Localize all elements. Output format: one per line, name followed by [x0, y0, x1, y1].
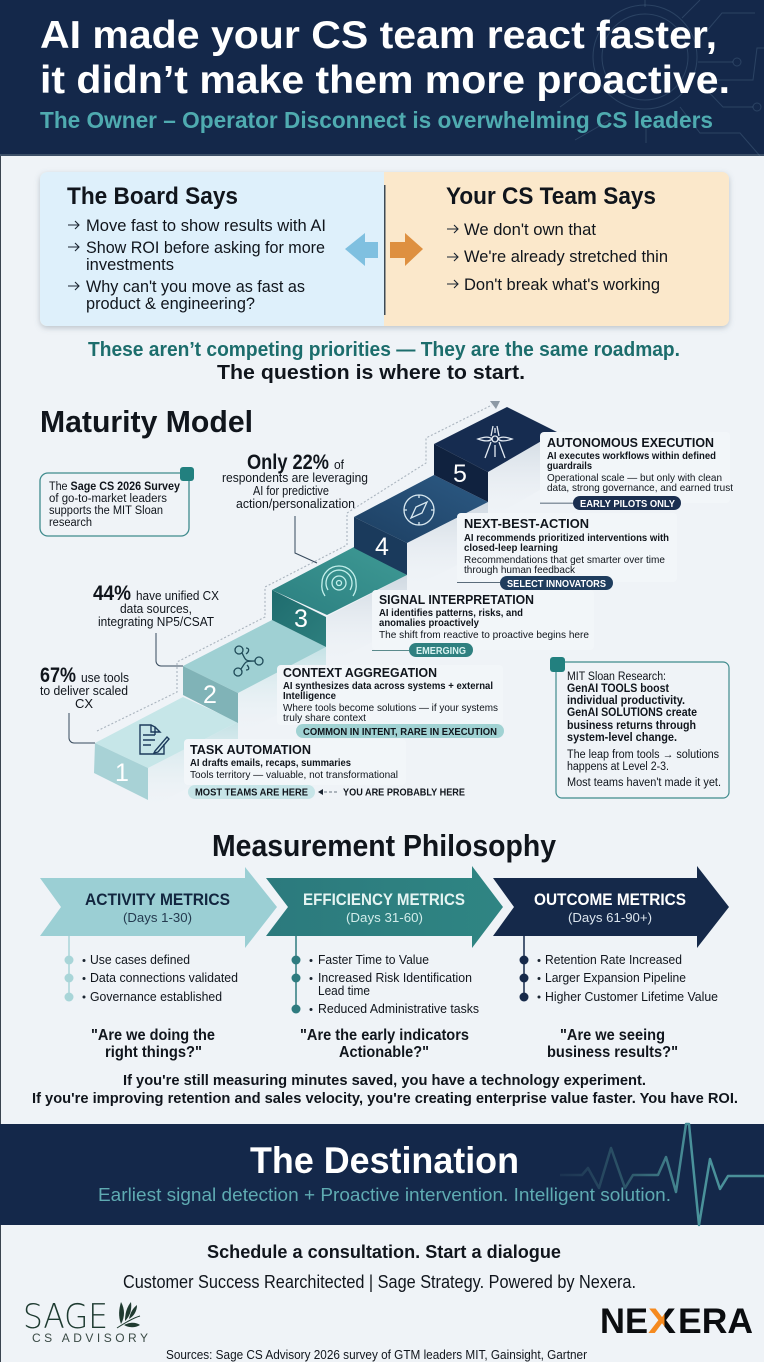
arrow: activity: (Days 1-30)	[123, 910, 192, 925]
checklist: outcome: Higher Customer Lifetime Value	[545, 990, 718, 1004]
level 5: autonomous execution: AUTONOMOUS EXECUTION	[547, 435, 714, 450]
destination subtitle: Earliest signal detection + Proactive intervention. Intelligent solution.	[98, 1184, 671, 1205]
level 2: context aggregation: AI synthesizes data across systems + external	[283, 680, 493, 692]
callout: sage survey: research	[49, 517, 92, 529]
checklist: outcome: Retention Rate Increased	[545, 953, 682, 967]
level 1: task automation: Tools territory — valuable, not transformational	[190, 769, 398, 781]
stat: 44 percent: have unified CX	[136, 588, 219, 603]
logo: nexera: ERA	[678, 1302, 753, 1341]
title	[40, 14, 730, 102]
stat: 22 percent: action/personalization	[236, 496, 355, 511]
arrow: efficiency: EFFICIENCY METRICS	[303, 891, 465, 909]
level 4: next-best-action: AI recommends prioritized interventions with	[464, 532, 669, 544]
dotted progress path	[97, 401, 500, 731]
callout: mit sloan research: The leap from tools → solutions	[567, 749, 719, 761]
step 5: 5	[453, 460, 467, 488]
level 2: context aggregation: truly share context	[283, 712, 366, 724]
board column: Show ROI before asking for more	[86, 238, 325, 257]
arrow: activity: ACTIVITY METRICS	[85, 891, 230, 909]
checklist: efficiency: Reduced Administrative tasks	[318, 1002, 479, 1016]
board column: investments	[86, 255, 174, 274]
icon: compass	[404, 495, 434, 525]
checklist: activity: Use cases defined	[90, 953, 190, 967]
checklist: outcome	[520, 936, 718, 1004]
closing statement	[32, 1073, 738, 1107]
level 2: context aggregation: CONTEXT AGGREGATION	[283, 665, 437, 680]
stat: 22 percent: respondents are leveraging	[222, 470, 368, 485]
subtitle: The Owner – Operator Disconnect is overwhelming CS leaders	[40, 107, 713, 133]
stat: 67 percent	[40, 664, 129, 743]
column: outcome metrics	[493, 866, 729, 1061]
panel: board vs team	[40, 172, 729, 326]
stat: 22 percent: of	[334, 457, 344, 472]
level 4: next-best-action: closed-leep learning	[464, 542, 558, 554]
callout: mit sloan research: Most teams haven't made it yet.	[567, 777, 721, 789]
checklist: outcome: Larger Expansion Pipeline	[545, 971, 686, 985]
badge: select innovators: SELECT INNOVATORS	[507, 578, 606, 590]
badge: most teams: MOST TEAMS ARE HERE	[195, 786, 308, 798]
level 4: next-best-action: Recommendations that get smarter over time	[464, 554, 665, 566]
step 4: 4	[375, 533, 389, 561]
stat: 22 percent	[222, 451, 368, 563]
title: AI made your CS team react faster,	[40, 14, 717, 57]
callout: mit sloan research	[550, 657, 729, 798]
level 3: signal interpretation: SIGNAL INTERPRETATION	[379, 592, 534, 607]
arrow: you are here	[318, 789, 338, 795]
arrow: outcome: (Days 61-90+)	[568, 910, 652, 925]
statement: same roadmap: The question is where to start.	[217, 362, 525, 384]
callout: sage survey: of go-to-market leaders	[49, 493, 167, 505]
team column	[446, 183, 668, 294]
heading: measurement philosophy: Measurement Philosophy	[212, 828, 557, 863]
icon: propeller	[478, 426, 512, 458]
step 3	[272, 547, 407, 647]
stat: 67 percent: to deliver scaled	[40, 683, 128, 698]
board column: Move fast to show results with AI	[86, 216, 326, 235]
arrow: activity	[40, 867, 277, 948]
icon: left arrow	[345, 233, 378, 266]
statement: same roadmap	[88, 339, 680, 384]
level 4: next-best-action: NEXT-BEST-ACTION	[464, 516, 589, 531]
level 5: autonomous execution	[540, 432, 733, 510]
title: it didn’t make them more proactive.	[40, 59, 730, 102]
stat: 44 percent	[93, 582, 219, 666]
call to action: Schedule a consultation. Start a dialogue	[207, 1242, 561, 1262]
callout: sage survey: supports the MIT Sloan	[49, 505, 163, 517]
checklist: activity: Governance established	[90, 990, 222, 1004]
level 3: signal interpretation	[372, 590, 594, 657]
statement: same roadmap: These aren’t competing priorities — They are the same roadmap.	[88, 339, 680, 361]
stat: 67 percent: use tools	[81, 670, 129, 685]
quote: activity: right things?"	[105, 1044, 202, 1061]
quote: efficiency: Actionable?"	[339, 1044, 429, 1061]
callout: mit sloan research: GenAI TOOLS boost	[567, 683, 669, 695]
callout: mit sloan research: business returns through	[567, 720, 696, 732]
step 2	[183, 620, 326, 723]
callout: mit sloan research: GenAI SOLUTIONS create	[567, 707, 697, 719]
destination title: The Destination	[250, 1140, 519, 1181]
callout: mit sloan research: MIT Sloan Research:	[567, 671, 666, 683]
logo: sage cs advisory: CS ADVISORY	[32, 1331, 148, 1345]
column: efficiency metrics	[266, 866, 503, 1061]
checklist: efficiency	[292, 936, 479, 1016]
level 3: signal interpretation: The shift from reactive to proactive begins here	[379, 629, 589, 641]
quote: activity: "Are we doing the	[91, 1027, 215, 1044]
circuit decoration	[560, 0, 764, 156]
checklist: activity: Data connections validated	[90, 971, 238, 985]
board column	[67, 183, 326, 313]
callout: sage survey	[40, 467, 194, 536]
quote: outcome: business results?"	[547, 1044, 678, 1061]
logo: sage cs advisory	[23, 1297, 148, 1345]
sources: Sources: Sage CS Advisory 2026 survey of GTM leaders MIT, Gainsight, Gartner	[166, 1347, 588, 1362]
level 1: task automation	[184, 739, 465, 799]
stat: 22 percent: AI for predictive	[253, 483, 329, 498]
level 5: autonomous execution: Operational scale — but only with clean	[547, 472, 722, 484]
stat: 22 percent: Only 22%	[247, 451, 329, 474]
quote: activity	[91, 1027, 215, 1061]
callout: mit sloan research: happens at Level 2-3.	[567, 761, 669, 773]
checklist: efficiency: Lead time	[318, 984, 370, 998]
quote: outcome: "Are we seeing	[560, 1027, 665, 1044]
level 4: next-best-action: through human feedback	[464, 564, 576, 576]
step 5	[434, 407, 557, 502]
level 4: next-best-action	[457, 513, 677, 590]
checklist: activity	[64, 936, 238, 1004]
team column: Don't break what's working	[464, 275, 660, 294]
checklist: efficiency: Increased Risk Identification	[318, 971, 472, 985]
quote: efficiency: "Are the early indicators	[300, 1027, 469, 1044]
step 1: 1	[115, 759, 129, 787]
level 3: signal interpretation: AI identifies patterns, risks, and	[379, 607, 523, 619]
badge: common in intent: COMMON IN INTENT, RARE IN EXECUTION	[303, 726, 497, 738]
logo: nexera: X	[648, 1302, 677, 1341]
stat: 44 percent: integrating NP5/CSAT	[98, 614, 214, 629]
closing statement: If you're improving retention and sales velocity, you're creating enterprise value faster. You have ROI.	[32, 1091, 738, 1107]
quote: outcome	[547, 1027, 678, 1061]
destination band	[0, 1124, 764, 1225]
stat: 44 percent: data sources,	[120, 601, 192, 616]
level 1: task automation: YOU ARE PROBABLY HERE	[343, 786, 465, 798]
level 3: signal interpretation: anomalies proactively	[379, 617, 479, 629]
header band	[0, 0, 764, 156]
stat: 44 percent: 44%	[93, 582, 131, 605]
logo: nexera: NE	[600, 1302, 648, 1341]
column: activity metrics	[40, 867, 277, 1061]
shadows	[148, 722, 238, 810]
logo: nexera	[600, 1302, 753, 1341]
board column: product & engineering?	[86, 294, 255, 313]
ecg line	[560, 1124, 764, 1225]
tagline: Customer Success Rearchitected | Sage Strategy. Powered by Nexera.	[123, 1272, 636, 1292]
icon: right arrow	[390, 233, 423, 266]
level 5: autonomous execution: AI executes workflows within defined	[547, 450, 716, 462]
arrow: outcome: OUTCOME METRICS	[534, 891, 686, 909]
callout: sage survey: The Sage CS 2026 Survey	[49, 481, 181, 493]
checklist: efficiency: Faster Time to Value	[318, 953, 429, 967]
icon: document	[140, 725, 169, 754]
closing statement: If you're still measuring minutes saved, you have a technology experiment.	[123, 1073, 646, 1089]
stat: 67 percent: 67%	[40, 664, 76, 687]
heading: maturity model: Maturity Model	[40, 404, 253, 439]
board column: Why can't you move as fast as	[86, 277, 305, 296]
icon: signal	[322, 566, 356, 596]
step 4	[354, 475, 488, 575]
icon: leaf	[117, 1302, 140, 1328]
callout: mit sloan research: system-level change.	[567, 732, 677, 744]
level 2: context aggregation: Intelligence	[283, 690, 336, 702]
step 2: 2	[203, 681, 217, 709]
team column: Your CS Team Says	[446, 183, 656, 210]
callout: mit sloan research: individual productivity.	[567, 695, 685, 707]
step 1	[94, 697, 238, 800]
level 1: task automation: AI drafts emails, recaps, summaries	[190, 757, 351, 769]
step 3: 3	[294, 605, 308, 633]
team column: We're already stretched thin	[464, 247, 668, 266]
badge: emerging: EMERGING	[416, 645, 466, 657]
icon: nodes	[234, 646, 263, 676]
logo: sage cs advisory: SAGE	[23, 1297, 108, 1337]
level 5: autonomous execution: data, strong governance, and earned trust	[547, 482, 733, 494]
staircase chart	[94, 401, 557, 810]
board column: The Board Says	[67, 183, 238, 210]
level 2: context aggregation	[277, 665, 504, 738]
level 2: context aggregation: Where tools become solutions — if your systems	[283, 702, 498, 714]
quote: efficiency	[300, 1027, 469, 1061]
badge: early pilots: EARLY PILOTS ONLY	[580, 498, 675, 510]
level 1: task automation: TASK AUTOMATION	[190, 742, 311, 757]
arrow: efficiency: (Days 31-60)	[346, 910, 423, 925]
stat: 67 percent: CX	[75, 696, 93, 711]
level 5: autonomous execution: guardrails	[547, 460, 592, 472]
arrow: efficiency	[266, 866, 503, 948]
team column: We don't own that	[464, 220, 596, 239]
arrow: outcome	[493, 866, 729, 948]
